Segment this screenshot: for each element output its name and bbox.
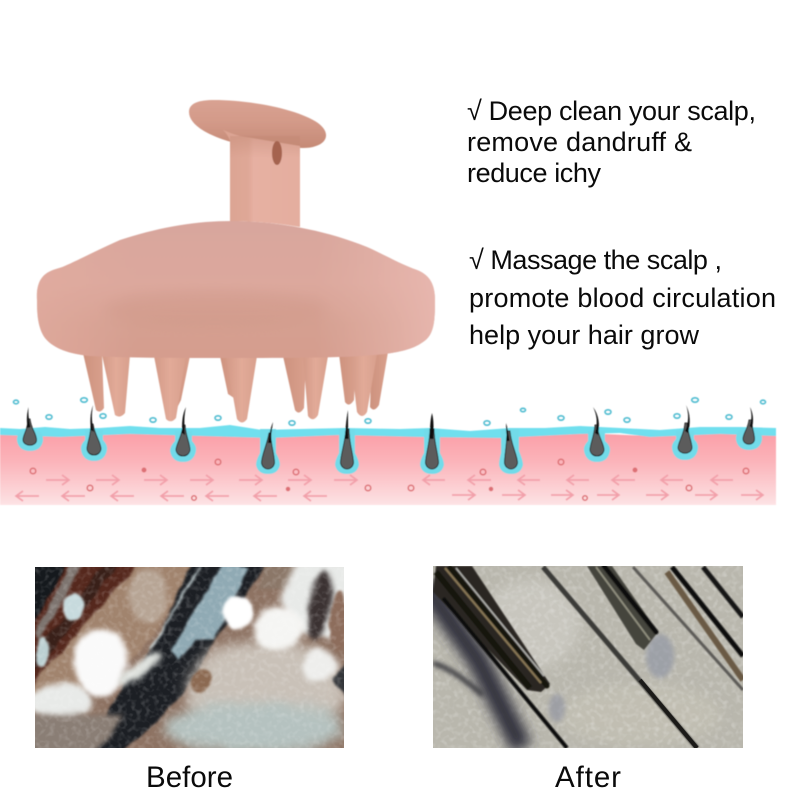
- after label: After: [555, 761, 621, 794]
- benefit text: massage: promote blood circulation: [469, 283, 776, 313]
- brush handle top: [189, 100, 326, 148]
- follicle 7: [499, 423, 523, 474]
- follicle 9: [672, 405, 698, 460]
- follicle 6: [420, 413, 444, 474]
- benefit text: deep clean: √ Deep clean your scalp,: [467, 96, 756, 126]
- skin layer: [0, 433, 776, 505]
- oil droplets: [14, 398, 766, 425]
- before photo texture: [35, 567, 344, 748]
- after photo texture: [433, 566, 743, 748]
- blood cells: [30, 459, 749, 500]
- scalp cross-section illustration: [0, 398, 776, 505]
- brush handle stem: [223, 130, 300, 227]
- oil layer on scalp surface: [0, 425, 776, 438]
- scalp massage brush: [37, 100, 435, 422]
- after photo: [425, 566, 743, 748]
- benefit text: massage: help your hair grow: [469, 320, 700, 350]
- follicles: [17, 405, 762, 474]
- follicle 8: [584, 407, 610, 462]
- benefit text: deep clean: reduce ichy: [467, 158, 602, 188]
- before photo: [35, 567, 344, 748]
- hanging hole: [272, 141, 282, 165]
- follicle 5: [335, 410, 359, 474]
- follicle 4: [256, 422, 280, 474]
- benefit text: deep clean: remove dandruff &: [467, 127, 692, 157]
- brush base: [37, 221, 435, 358]
- follicle 2: [81, 405, 107, 461]
- before label: Before: [146, 761, 233, 794]
- brush bristles: [83, 352, 388, 422]
- circulation arrows: [16, 475, 763, 501]
- follicle 3: [170, 407, 196, 462]
- benefit text: deep clean: [467, 96, 756, 188]
- follicle 1: [17, 407, 43, 451]
- follicle 10: [736, 407, 762, 450]
- benefit text: massage: [469, 245, 776, 350]
- benefit text: massage: √ Massage the scalp ,: [469, 245, 722, 275]
